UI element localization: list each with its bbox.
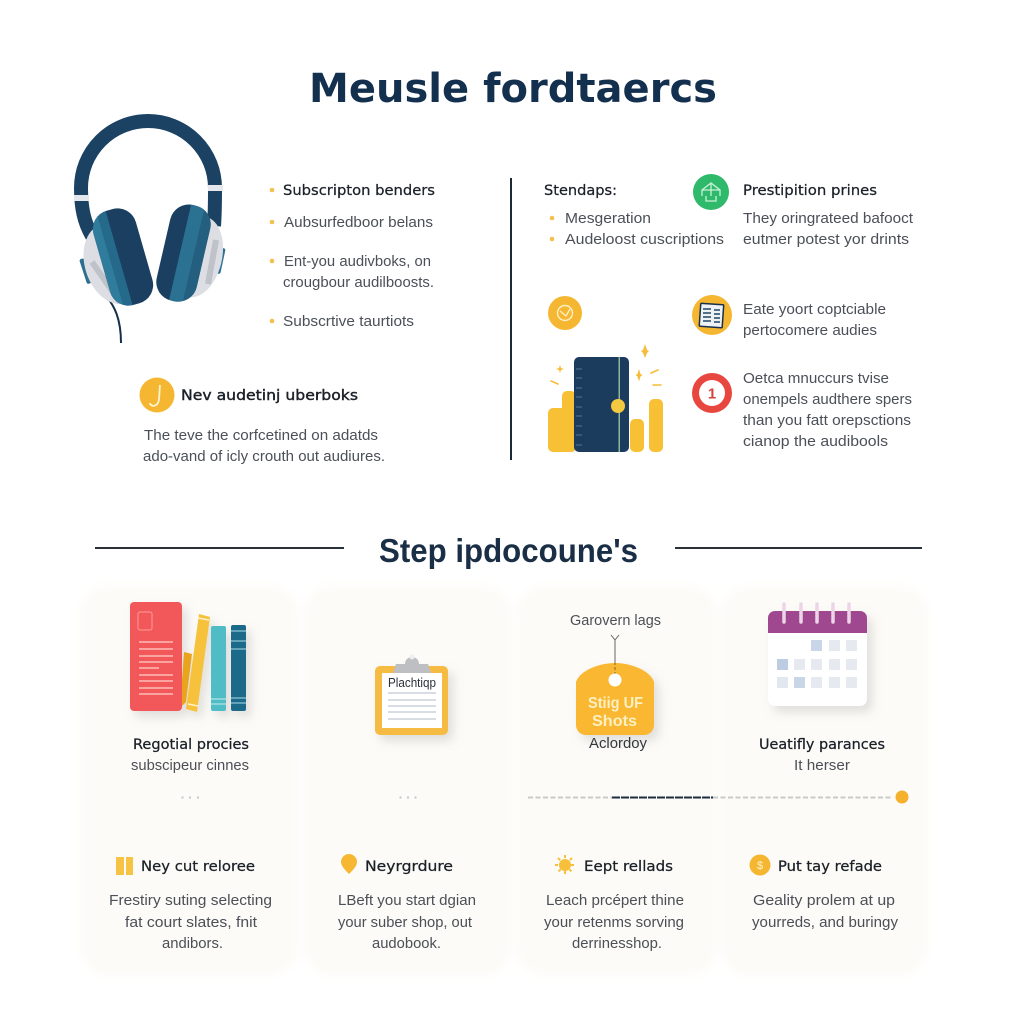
tip 4: yourreds, and buringy bbox=[752, 915, 899, 931]
icon: price tag: Stiig UF bbox=[588, 695, 643, 712]
tip 3: your retenms sorving bbox=[544, 915, 684, 931]
bullet list: subscription: Aubsurfedboor belans bbox=[284, 215, 433, 231]
bullet list: subscription: Ent-you audivboks, on bbox=[284, 254, 431, 270]
tip 3: derrinesshop. bbox=[572, 936, 662, 952]
tip 1 bbox=[109, 857, 272, 952]
title: Meusle fordtaercs bbox=[309, 66, 717, 112]
steps list: Audeloost cuscriptions bbox=[565, 232, 724, 248]
audience text bbox=[743, 302, 886, 339]
icon: yellow coin bbox=[548, 296, 582, 330]
comparison text bbox=[743, 371, 912, 450]
icon: red number badge: 1 bbox=[708, 386, 716, 402]
bullet list: subscription: Subscripton benders bbox=[283, 183, 435, 199]
tip 3 bbox=[544, 855, 684, 952]
icon: books bbox=[130, 602, 246, 712]
step 4 caption: It herser bbox=[794, 758, 850, 774]
tip 2: your suber shop, out bbox=[338, 915, 472, 931]
icon: clipboard bbox=[375, 654, 448, 735]
prescription text: eutmer potest yor drints bbox=[743, 232, 909, 248]
step 4 caption bbox=[759, 737, 885, 774]
icon: music note bbox=[140, 378, 174, 412]
bullet list: subscription: Subscrtive taurtiots bbox=[283, 314, 414, 330]
tip 2: LBeft you start dgian bbox=[338, 893, 476, 909]
step 1 caption bbox=[131, 737, 249, 774]
tip 1: andibors. bbox=[162, 936, 223, 952]
tip 4: $ bbox=[757, 860, 763, 872]
bullet list: subscription bbox=[270, 183, 435, 330]
step 4 caption: Ueatifly parances bbox=[759, 737, 885, 753]
bar chart with book bbox=[548, 344, 663, 452]
tag caption: Aclordoy bbox=[589, 736, 648, 752]
timeline bbox=[528, 790, 908, 804]
prescription text bbox=[743, 183, 913, 248]
audience text: pertocomere audies bbox=[743, 323, 877, 339]
icon: calendar bbox=[768, 604, 867, 706]
step 1 caption: subscipeur cinnes bbox=[131, 758, 249, 774]
comparison text: cianop the audibools bbox=[743, 434, 888, 450]
tip 2: Neyrgrdure bbox=[365, 859, 453, 875]
steps list: Mesgeration bbox=[565, 211, 651, 227]
tip 1: Frestiry suting selecting bbox=[109, 893, 272, 909]
callout text: The teve the corfcetined on adatds bbox=[144, 428, 378, 444]
prescription text: Prestipition prines bbox=[743, 183, 877, 199]
tip 2: audobook. bbox=[372, 936, 441, 952]
tip 4 bbox=[750, 854, 899, 931]
icon: price tag bbox=[576, 635, 654, 735]
callout text bbox=[143, 428, 385, 465]
comparison text: than you fatt orepsctions bbox=[743, 413, 911, 429]
tag label: Garovern lags bbox=[570, 613, 661, 629]
tip 1: Ney cut reloree bbox=[141, 859, 255, 875]
icon: clipboard: Plachtiqp bbox=[388, 676, 436, 690]
steps list bbox=[544, 183, 724, 248]
prescription text: They oringrateed bafooct bbox=[743, 211, 913, 227]
tip 4: Geality prolem at up bbox=[753, 893, 895, 909]
icon: green badge bbox=[693, 174, 729, 210]
icon: red number badge bbox=[692, 373, 732, 413]
icon: price tag: Shots bbox=[592, 713, 637, 730]
callout heading: Nev audetinj uberboks bbox=[181, 388, 358, 404]
section heading with rules: Step ipdocoune's bbox=[379, 532, 638, 569]
icon: headphones bbox=[74, 121, 231, 343]
tip 2 bbox=[338, 854, 476, 952]
tip 3: Leach prcépert thine bbox=[546, 893, 684, 909]
callout text: ado-vand of icly crouth out audiures. bbox=[143, 449, 385, 465]
tip 4: Put tay refade bbox=[778, 859, 882, 875]
vertical divider bbox=[510, 178, 512, 460]
tip 3: Eept rellads bbox=[584, 859, 673, 875]
icon: document badge bbox=[692, 295, 732, 335]
comparison text: Oetca mnuccurs tvise bbox=[743, 371, 889, 387]
step 1 caption: Regotial procies bbox=[133, 737, 249, 753]
bullet list: subscription: crougbour audilboosts. bbox=[283, 275, 434, 291]
steps list: Stendaps: bbox=[544, 183, 617, 199]
tip 1: fat court slates, fnit bbox=[125, 915, 257, 931]
dots bbox=[182, 796, 416, 798]
audience text: Eate yoort coptciable bbox=[743, 302, 886, 318]
comparison text: onempels audthere spers bbox=[743, 392, 912, 408]
panel: step cards bbox=[80, 586, 928, 975]
